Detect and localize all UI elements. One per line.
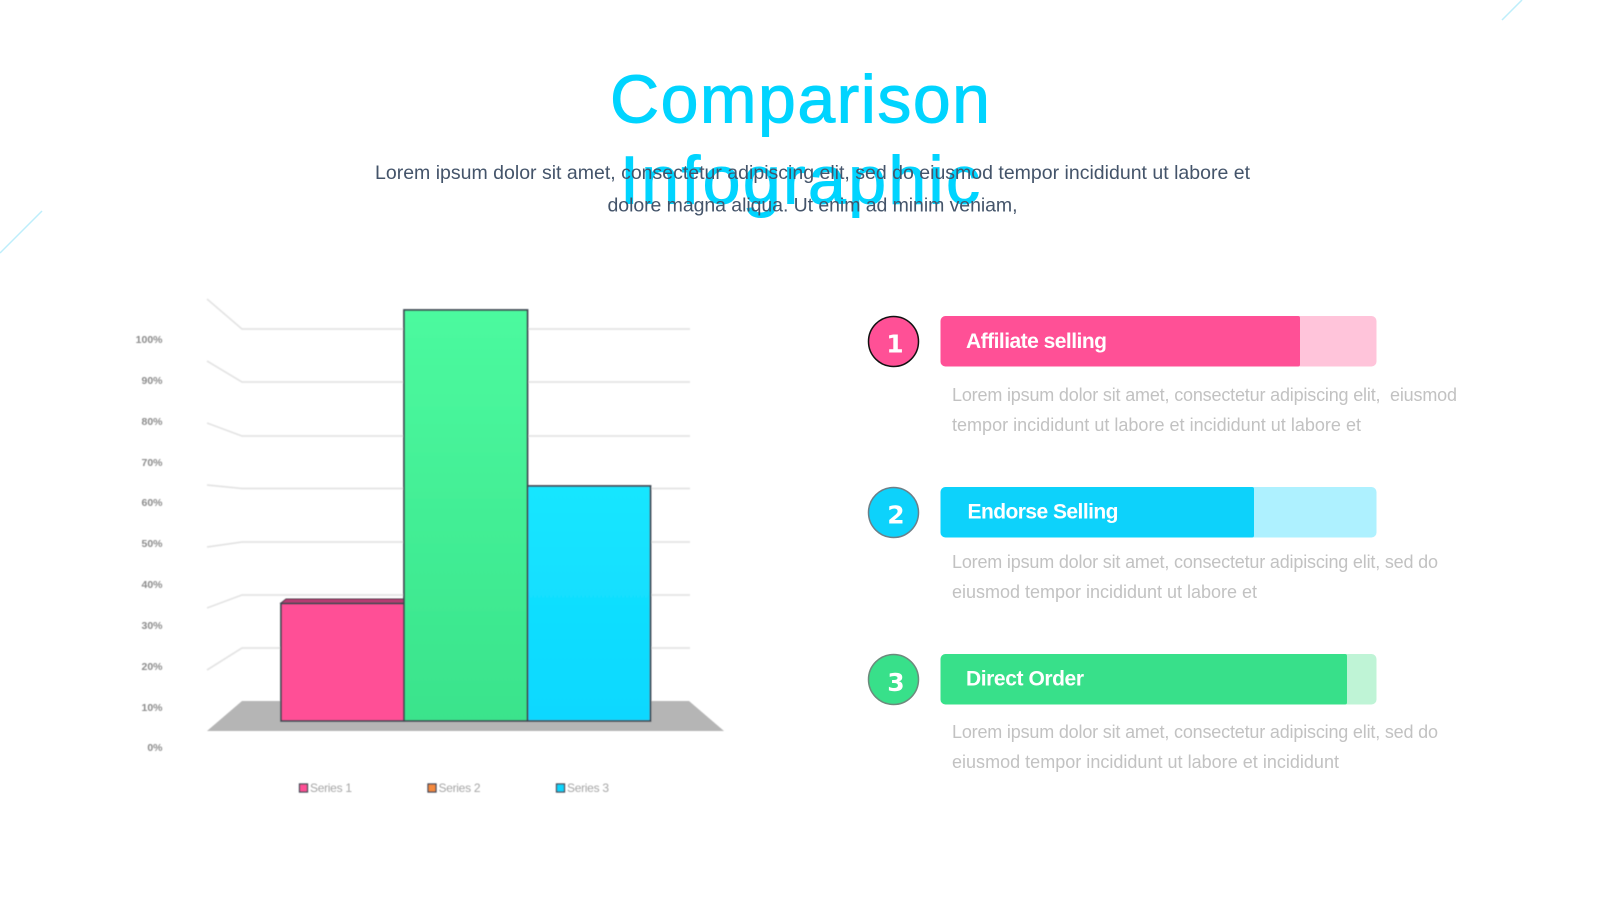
chart floor [207, 701, 724, 731]
number badge 2: 2 [887, 500, 905, 530]
y-axis labels [136, 334, 163, 754]
progress bar 1: Affiliate selling [966, 330, 1107, 353]
chart legend: Series 2 [438, 781, 481, 795]
y-axis labels: 90% [141, 375, 163, 387]
bar: series 3 [528, 486, 650, 721]
title: Infographic [620, 142, 980, 218]
y-axis labels: 60% [141, 497, 163, 509]
progress bar 1 [940, 316, 1376, 366]
title: Comparison [610, 62, 990, 138]
y-axis labels: 40% [141, 579, 163, 591]
bar chart [136, 299, 724, 795]
description 3 [952, 722, 1438, 772]
description 1 [952, 385, 1457, 435]
item 1: affiliate selling [868, 316, 1457, 435]
number badge 1 [868, 316, 918, 366]
y-axis labels: 80% [141, 416, 163, 428]
number badge 1: 1 [886, 330, 904, 358]
chart legend: Series 1 [310, 781, 352, 795]
description 3: eiusmod tempor incididunt ut labore et incididunt [952, 752, 1339, 772]
y-axis labels: 10% [141, 702, 163, 714]
y-axis labels: 50% [141, 538, 163, 550]
progress bar 2: Endorse Selling [968, 500, 1118, 524]
bar: series 1 [281, 599, 404, 721]
item 2: endorse selling [868, 487, 1438, 602]
item 3: direct order [868, 654, 1438, 772]
subtitle text: Lorem ipsum dolor sit amet, consectetur adipiscing elit, sed do eiusmod tempor incididunt ut labore et [375, 162, 1251, 184]
chart legend: Series 3 [567, 781, 609, 795]
bar: series 2 [404, 310, 528, 721]
description 2: eiusmod tempor incididunt ut labore et [952, 582, 1257, 602]
description 2 [952, 552, 1438, 602]
title [610, 62, 990, 218]
progress bar 3 [940, 654, 1376, 704]
description 2: Lorem ipsum dolor sit amet, consectetur adipiscing elit, sed do [952, 552, 1438, 572]
progress bar 2 [940, 487, 1376, 538]
y-axis labels: 100% [136, 334, 163, 346]
description 3: Lorem ipsum dolor sit amet, consectetur adipiscing elit, sed do [952, 722, 1438, 742]
number badge 2 [868, 488, 918, 538]
number badge 3 [868, 654, 918, 704]
y-axis labels: 20% [141, 661, 163, 673]
y-axis labels: 0% [147, 742, 163, 754]
number badge 3: 3 [887, 668, 905, 697]
description 1: tempor incididunt ut labore et incididunt ut labore et [952, 415, 1361, 435]
y-axis labels: 70% [141, 457, 163, 469]
y-axis labels: 30% [141, 620, 163, 632]
description 1: Lorem ipsum dolor sit amet, consectetur adipiscing elit, eiusmod [952, 385, 1457, 405]
chart legend [300, 781, 609, 795]
progress bar 3: Direct Order [966, 668, 1084, 690]
subtitle text: dolore magna aliqua. Ut enim ad minim veniam, [608, 194, 1018, 216]
subtitle text [375, 162, 1251, 216]
